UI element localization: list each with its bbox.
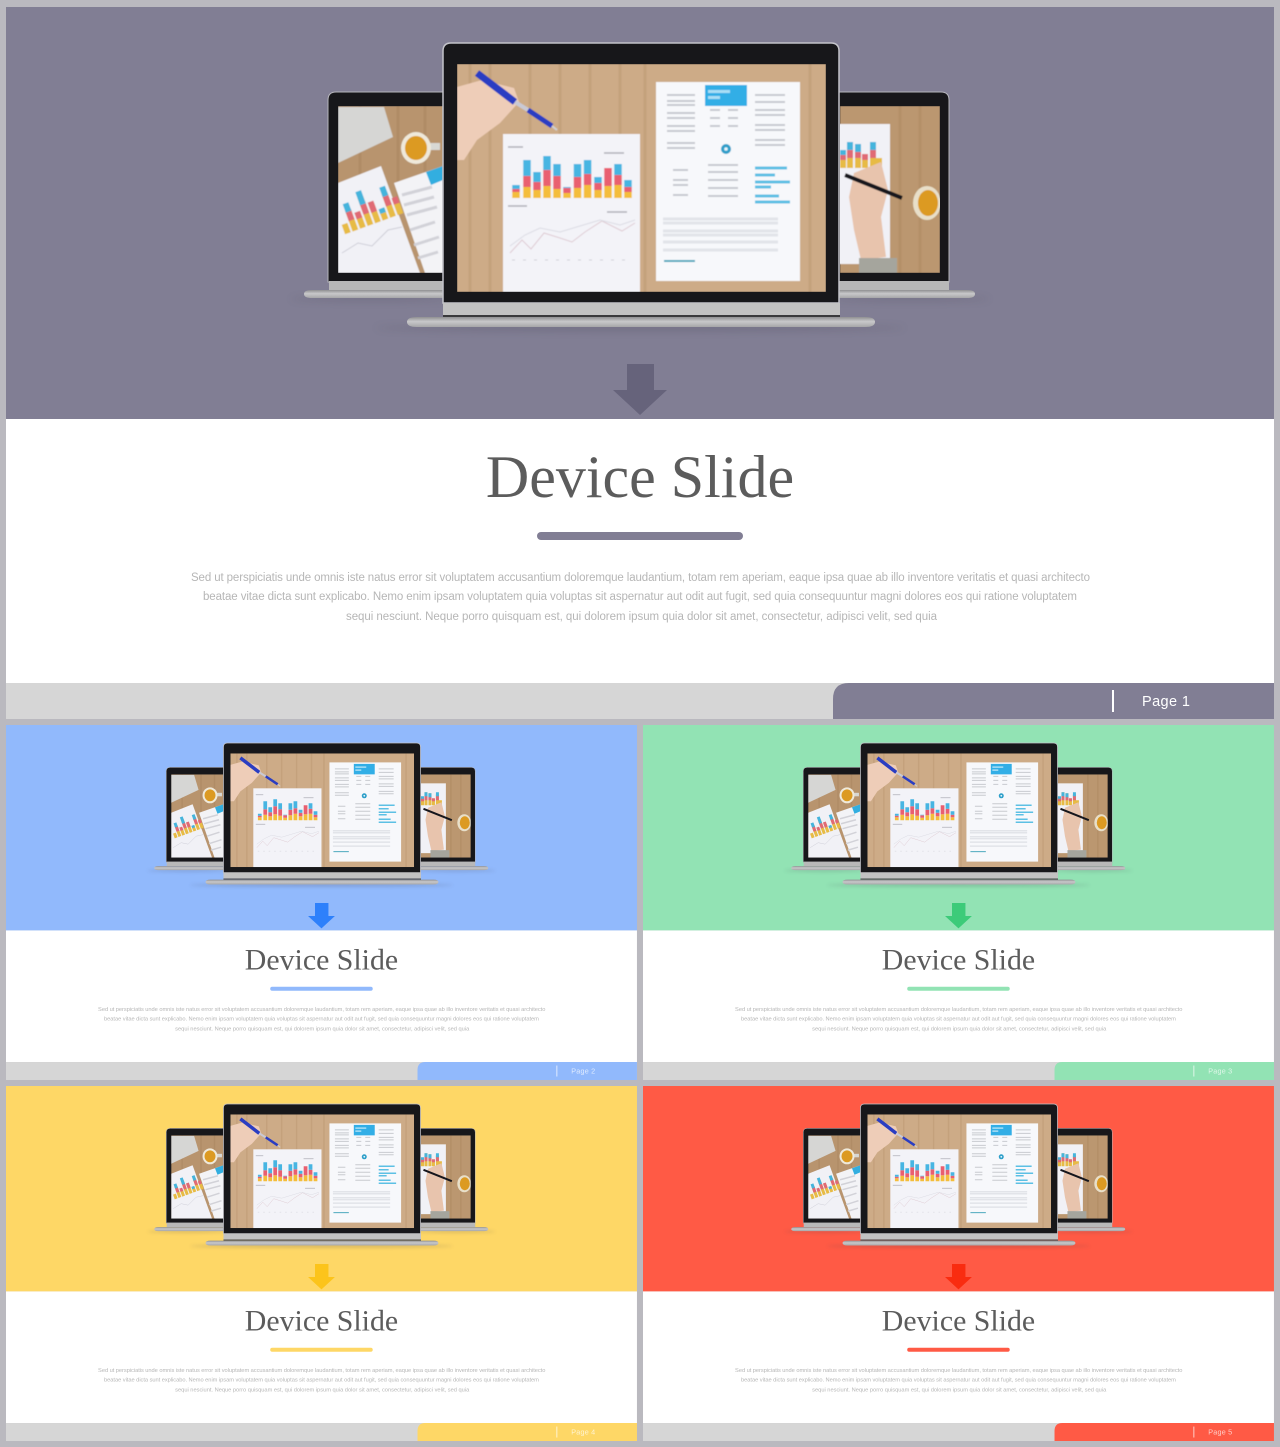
heading underline (907, 1348, 1010, 1352)
heading: Device Slide (245, 1304, 398, 1337)
down arrow (308, 1264, 335, 1289)
content area (6, 1291, 637, 1423)
page number: Page 3 (1208, 1067, 1232, 1076)
body text: beatae vitae dicta sunt explicabo. Nemo enim ipsam voluptatem quia voluptas sit aspernatur aut odit aut fugit, sed quia consequuntur magni dolores eos qui ratione voluptatem (104, 1017, 539, 1023)
photo band (643, 725, 1274, 930)
body text (191, 572, 1090, 623)
front screen photo (457, 64, 826, 292)
page number (556, 1427, 595, 1438)
heading: Device Slide (245, 943, 398, 976)
body text: beatae vitae dicta sunt explicabo. Nemo enim ipsam voluptatem quia voluptas sit aspernatur aut odit aut fugit, sed quia consequuntur magni dolores eos qui ratione voluptatem (104, 1378, 539, 1384)
body text: sequi nesciunt. Neque porro quisquam est, qui dolorem ipsum quia dolor sit amet, consectetur, adipisci velit, sed quia (346, 611, 938, 623)
line chart (510, 221, 635, 253)
stacked bars (516, 156, 628, 198)
heading underline (907, 987, 1010, 991)
body text: sequi nesciunt. Neque porro quisquam est, qui dolorem ipsum quia dolor sit amet, consectetur, adipisci velit, sed quia (812, 1388, 1107, 1394)
device mockup (784, 743, 1133, 887)
footer tab (1055, 1062, 1274, 1080)
footer tab (1055, 1423, 1274, 1441)
rear right screen photo (838, 106, 941, 273)
panel: main slide, page 1 (6, 7, 1274, 719)
heading: Device Slide (882, 943, 1035, 976)
content area (643, 1291, 1274, 1423)
down arrow (945, 903, 972, 928)
page number: Page 4 (571, 1428, 595, 1437)
panel: yellow slide, page 4 (6, 1086, 637, 1441)
page number: Page 5 (1208, 1428, 1232, 1437)
device mockup (784, 1104, 1133, 1248)
footer bar (6, 1423, 637, 1441)
content area (6, 930, 637, 1062)
heading underline (537, 532, 743, 540)
down arrow (308, 903, 335, 928)
panel: green slide, page 3 (643, 725, 1274, 1080)
body text (735, 1007, 1182, 1033)
body text: Sed ut perspiciatis unde omnis iste natus error sit voluptatem accusantium doloremque laudantium, totam rem aperiam, eaque ipsa quae ab illo inventore veritatis et quasi architecto (98, 1007, 545, 1013)
rear left screen photo (336, 106, 443, 273)
down arrow (613, 364, 667, 415)
body text: beatae vitae dicta sunt explicabo. Nemo enim ipsam voluptatem quia voluptas sit aspernatur aut odit aut fugit, sed quia consequuntur magni dolores eos qui ratione voluptatem (203, 591, 1077, 603)
footer tab (418, 1062, 637, 1080)
rear right laptop (838, 92, 975, 298)
body text: Sed ut perspiciatis unde omnis iste natus error sit voluptatem accusantium doloremque laudantium, totam rem aperiam, eaque ipsa quae ab illo inventore veritatis et quasi architecto (735, 1368, 1182, 1374)
panel: red slide, page 5 (643, 1086, 1274, 1441)
page number: Page 2 (571, 1067, 595, 1076)
footer tab (418, 1423, 637, 1441)
heading: Device Slide (882, 1304, 1035, 1337)
heading underline (270, 987, 373, 991)
body text: beatae vitae dicta sunt explicabo. Nemo enim ipsam voluptatem quia voluptas sit aspernatur aut odit aut fugit, sed quia consequuntur magni dolores eos qui ratione voluptatem (741, 1017, 1176, 1023)
body text: Sed ut perspiciatis unde omnis iste natus error sit voluptatem accusantium doloremque laudantium, totam rem aperiam, eaque ipsa quae ab illo inventore veritatis et quasi architecto (735, 1007, 1182, 1013)
footer bar (643, 1062, 1274, 1080)
body text (98, 1368, 545, 1394)
panel: blue slide, page 2 (6, 725, 637, 1080)
heading: Device Slide (486, 444, 794, 510)
body text (735, 1368, 1182, 1394)
device mockup (147, 743, 496, 887)
chart paper (503, 134, 640, 292)
front laptop (407, 43, 875, 327)
page number (1193, 1427, 1232, 1438)
heading underline (270, 1348, 373, 1352)
footer tab (833, 683, 1274, 719)
footer bar (6, 683, 1274, 719)
body text: sequi nesciunt. Neque porro quisquam est, qui dolorem ipsum quia dolor sit amet, consectetur, adipisci velit, sed quia (812, 1027, 1107, 1033)
rear left laptop (304, 92, 445, 298)
footer bar (6, 1062, 637, 1080)
body text: beatae vitae dicta sunt explicabo. Nemo enim ipsam voluptatem quia voluptas sit aspernatur aut odit aut fugit, sed quia consequuntur magni dolores eos qui ratione voluptatem (741, 1378, 1176, 1384)
content area (643, 930, 1274, 1062)
photo band (6, 725, 637, 930)
hand with pen (457, 73, 557, 160)
resume paper (656, 82, 800, 281)
body text: Sed ut perspiciatis unde omnis iste natus error sit voluptatem accusantium doloremque laudantium, totam rem aperiam, eaque ipsa quae ab illo inventore veritatis et quasi architecto (191, 572, 1090, 584)
photo band (6, 7, 1274, 419)
device mockup (147, 1104, 496, 1248)
page number (1193, 1066, 1232, 1077)
body text: Sed ut perspiciatis unde omnis iste natus error sit voluptatem accusantium doloremque laudantium, totam rem aperiam, eaque ipsa quae ab illo inventore veritatis et quasi architecto (98, 1368, 545, 1374)
page number (556, 1066, 595, 1077)
content area (6, 419, 1274, 683)
page number: Page 1 (1142, 694, 1190, 710)
wood desk (457, 64, 826, 292)
photo band (643, 1086, 1274, 1291)
body text: sequi nesciunt. Neque porro quisquam est, qui dolorem ipsum quia dolor sit amet, consectetur, adipisci velit, sed quia (175, 1027, 470, 1033)
device mockup: three laptops (290, 43, 990, 331)
down arrow (945, 1264, 972, 1289)
photo band (6, 1086, 637, 1291)
page number (1112, 690, 1190, 712)
laptop shadows (290, 297, 990, 331)
footer bar (643, 1423, 1274, 1441)
body text: sequi nesciunt. Neque porro quisquam est, qui dolorem ipsum quia dolor sit amet, consectetur, adipisci velit, sed quia (175, 1388, 470, 1394)
body text (98, 1007, 545, 1033)
